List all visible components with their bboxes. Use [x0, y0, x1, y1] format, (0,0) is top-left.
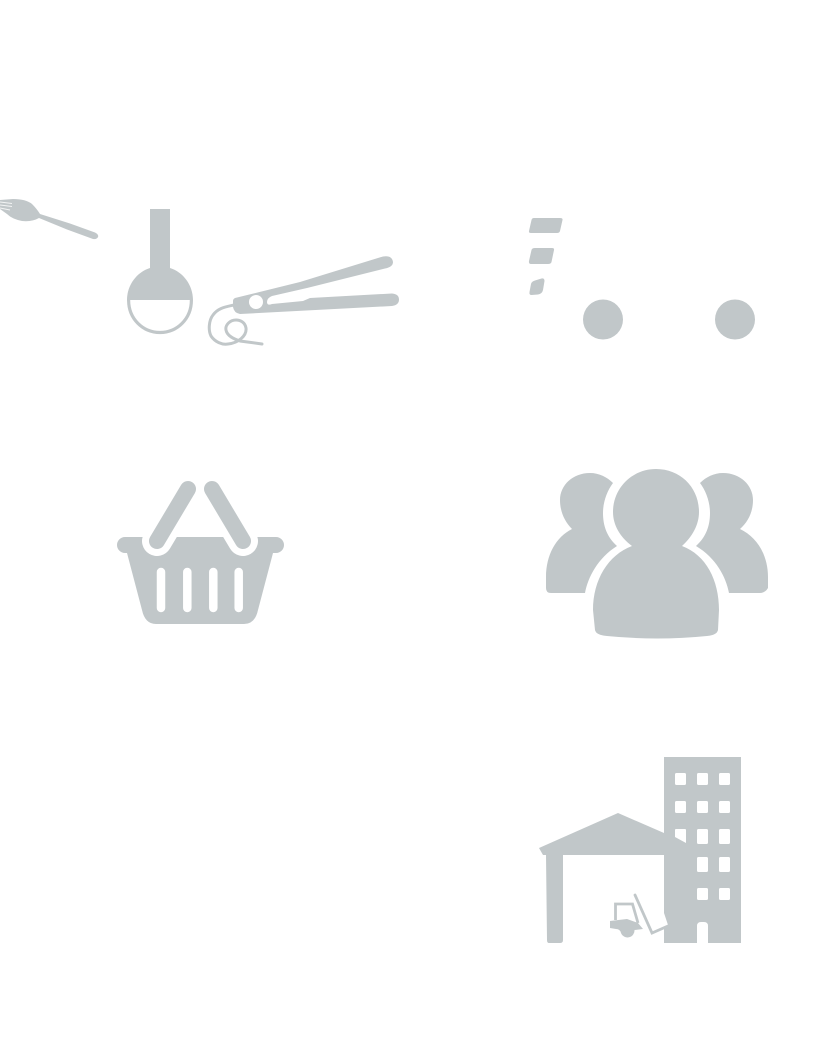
warehouse roof and column [539, 813, 664, 943]
speed bar: middle [529, 248, 554, 264]
icon: fork [0, 199, 98, 239]
person: right [696, 473, 768, 593]
tower [664, 757, 741, 943]
person: left [546, 473, 617, 593]
icon: group of people [546, 469, 768, 638]
tower windows [675, 773, 730, 900]
speed bar: bottom [529, 278, 544, 295]
truck wheel: front [715, 300, 755, 340]
icon: shopping basket [117, 489, 284, 624]
icon: hair straightener [209, 256, 399, 344]
truck wheel: rear [583, 300, 623, 340]
speed bar: top [529, 218, 563, 233]
icon: warehouse and office building [539, 757, 741, 943]
icon: delivery truck [529, 218, 755, 340]
forklift [610, 895, 668, 937]
icon: flask [127, 209, 193, 332]
person: centre [593, 469, 719, 638]
